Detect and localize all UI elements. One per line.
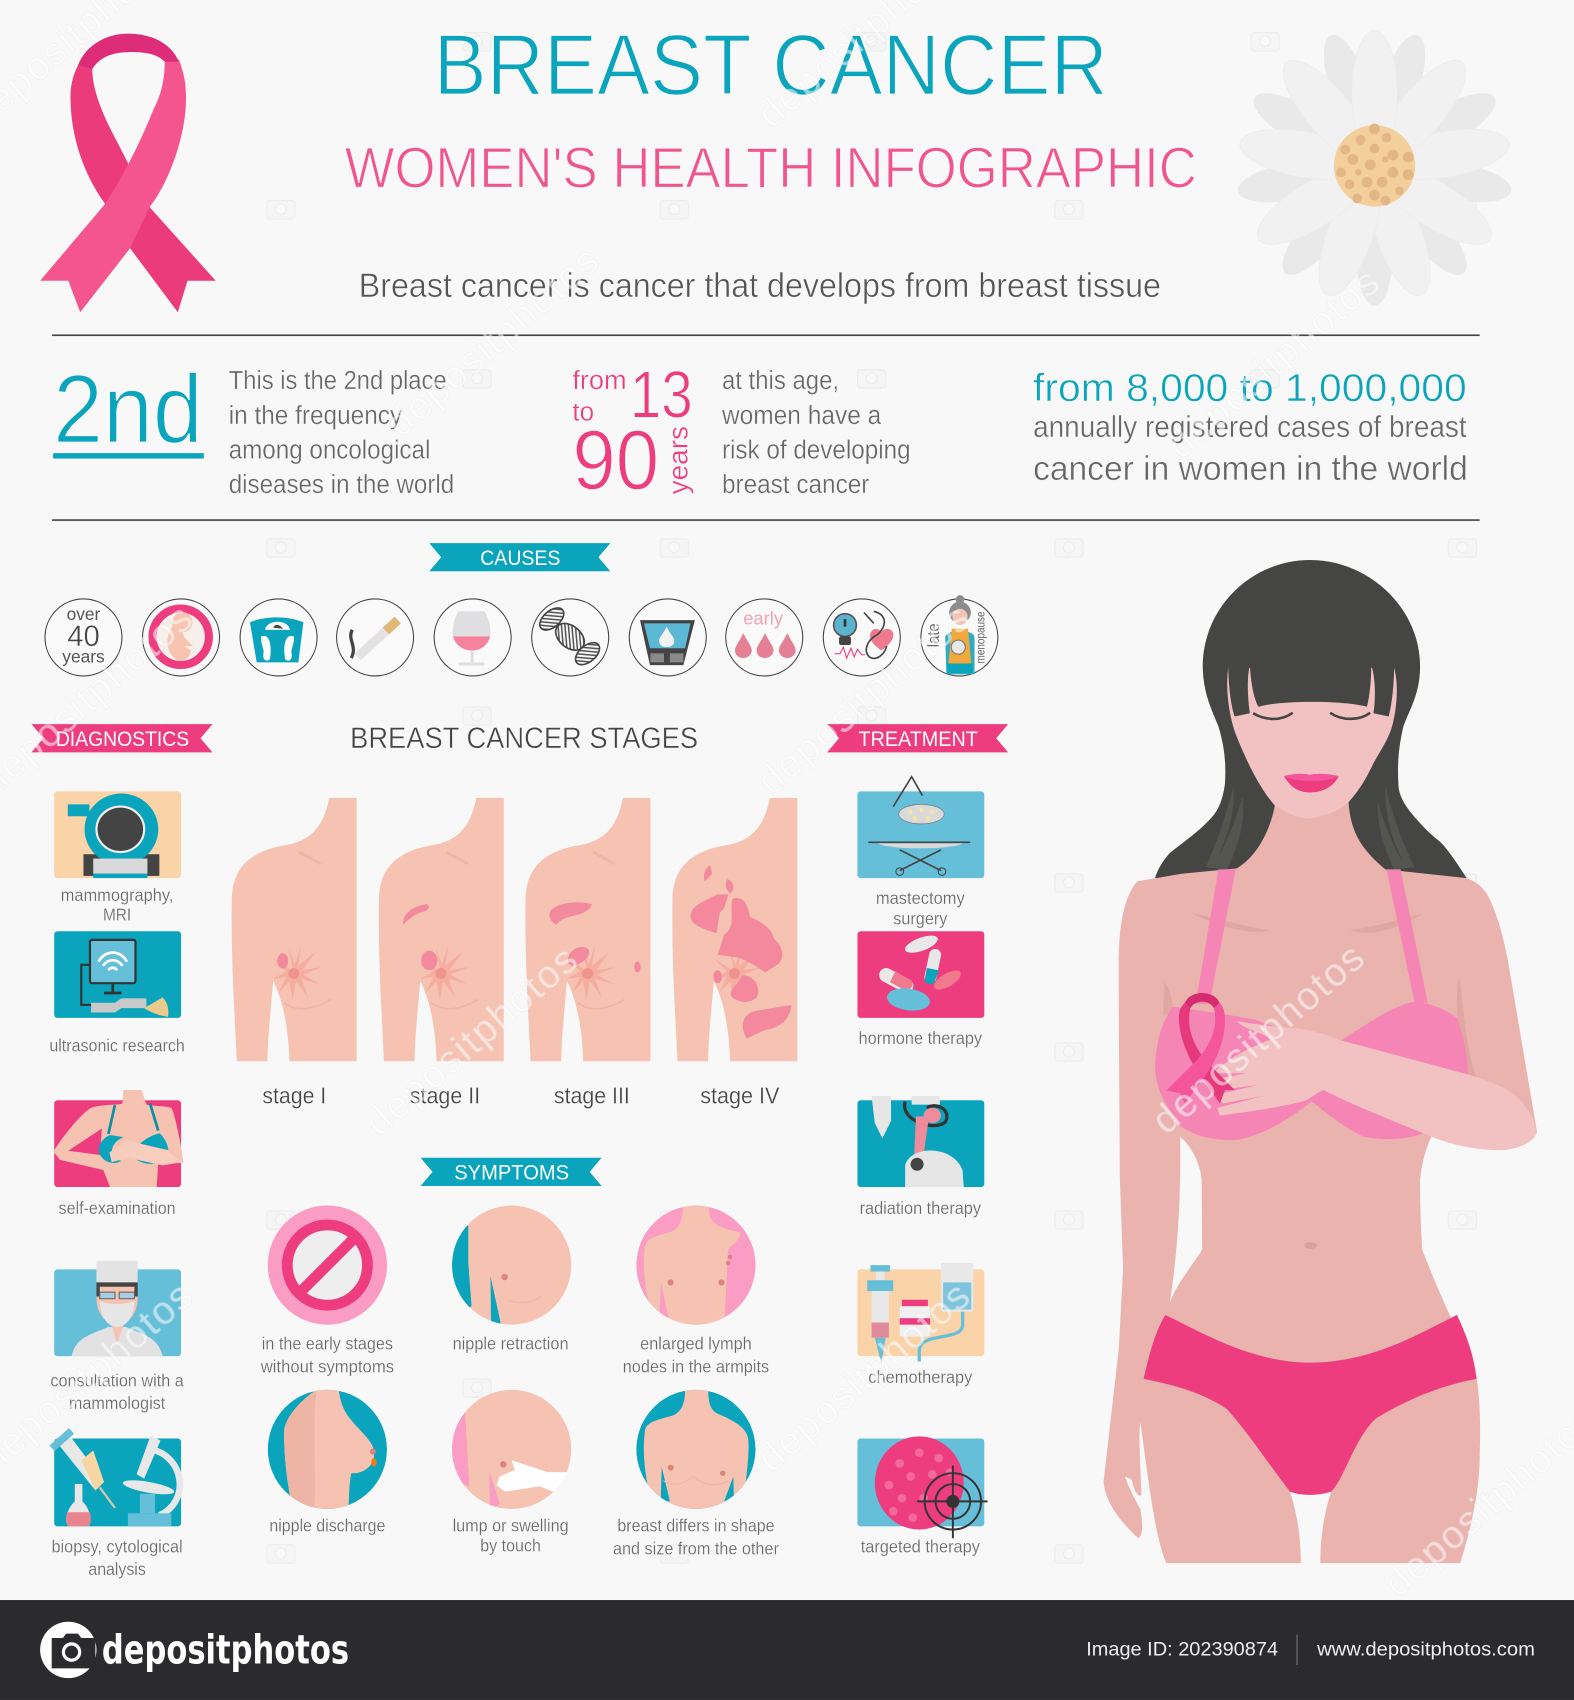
stage I illustration [232,798,357,1061]
label: hormone therapy [859,1028,982,1048]
label: MRI [103,904,131,924]
stat: age range: women have a [721,400,882,430]
label: mastectomy [876,888,965,908]
icon: chemotherapy [857,1263,984,1364]
face [1227,668,1397,818]
closed eyes [1253,713,1370,719]
stat: age range: risk of developing [722,435,911,465]
hair [1155,560,1467,878]
stage III label: stage III [554,1083,630,1109]
arm gap [1170,1137,1202,1303]
label: and size from the other [613,1539,779,1559]
stat: 2nd place [53,354,454,499]
icon: lump or swelling [444,1390,577,1509]
watermarks: depositphotos [750,1274,978,1481]
divider [52,519,1480,521]
label: self-examination [59,1198,176,1218]
heading: symptoms [421,1158,602,1186]
label [613,1516,779,1559]
icon: late menopause: late [925,623,943,647]
stat: age range: years [661,426,693,494]
heading: diagnostics: DIAGNOSTICS [56,726,189,751]
stage III illustration [525,798,650,1061]
stat: annual cases [1033,367,1468,488]
hair strands [1205,786,1415,869]
heading: causes [429,543,610,571]
stat text: diseases in the world [229,469,454,499]
watermarks: depositphotos [750,597,978,804]
icon: mastectomy surgery [857,777,984,878]
icon: ultrasound [54,931,181,1018]
label: without symptoms [260,1356,394,1376]
stat text: This is the 2nd place [229,365,447,395]
label: by touch [480,1535,541,1555]
stat: age range: at this age, [722,365,839,395]
divider [52,334,1480,336]
label: nipple discharge [269,1516,385,1536]
label: lump or swelling [453,1516,569,1536]
navel [1304,1242,1317,1249]
label: in the early stages [262,1334,393,1354]
icon: DNA helix [532,599,609,676]
label: mammography, [61,885,173,905]
stat number: 2nd [53,354,203,463]
icon: nipple discharge [268,1390,387,1509]
stat: age range: 90 [572,412,659,507]
panel: breast cancer stages [232,798,797,1109]
icon: daisy flower [1235,29,1514,306]
heading: symptoms: SYMPTOMS [454,1159,569,1184]
label: biopsy, cytological [51,1536,183,1556]
label: ultrasonic research [49,1036,185,1056]
icon: radiation therapy [857,1096,984,1187]
icon: scales [240,599,317,676]
arm shading [1163,978,1476,1078]
icon: late menopause [921,595,998,676]
stat: annual cases: annually registered cases of breast [1033,411,1467,444]
icon: early drops [726,599,803,676]
bikini bottom [1144,1315,1476,1495]
label [260,1334,394,1376]
body [1104,802,1537,1563]
bangs [1228,640,1394,717]
icon: fetus [143,599,220,676]
label: chemotherapy [868,1367,973,1387]
icon: over 40 years: 40 [67,621,100,653]
label: mammologist [69,1393,165,1413]
panel: treatment [857,777,988,1556]
label: nodes in the armpits [623,1356,769,1376]
label: breast differs in shape [617,1516,775,1536]
heading: causes: CAUSES [480,545,560,570]
stat: age range: to [572,397,594,427]
stat text [229,365,454,499]
icon: cigarette [337,599,414,676]
label: surgery [893,909,948,929]
icon: nipple retraction [444,1205,571,1328]
label [61,885,173,924]
stat text: in the frequency [229,400,402,430]
small ribbon on chest [1166,993,1235,1104]
icon: wine glass [434,599,511,676]
label: consultation with a [50,1370,184,1390]
stat text: among oncological [229,435,430,465]
subtitle: WOMEN'S HEALTH INFOGRAPHIC [345,137,1197,201]
label: nipple retraction [453,1334,569,1354]
bra cups [1155,1002,1468,1140]
heading: treatment [827,724,1008,752]
figure: woman illustration [1104,560,1537,1563]
icon: targeted therapy [857,1436,988,1538]
icon: breast differs [636,1390,756,1512]
image id: Image ID: 202390874 [1086,1638,1278,1660]
website: www.depositphotos.com [1316,1638,1535,1660]
watermarks: depositphotos [1159,261,1388,468]
icon: enlarged lymph nodes [636,1205,756,1328]
icon: self examination [53,1090,183,1187]
heading: treatment: TREATMENT [859,726,978,751]
collarbone shading [1190,913,1422,933]
icon: over 40 years [45,599,122,676]
icon: pink awareness ribbon [40,34,216,312]
watermark camera marks [267,33,1476,1563]
logo wordmark: depositphotos [102,1627,349,1673]
icon: biopsy [52,1431,181,1526]
panel: symptoms [260,1205,779,1559]
label [51,1536,183,1579]
icon: mammography MRI [54,791,181,878]
watermarks: depositphotos [357,938,586,1145]
icon: hormone therapy [857,931,984,1018]
stage IV illustration [672,798,797,1061]
watermarks: depositphotos [379,239,607,446]
stat underline [53,453,204,459]
icon: over 40 years: years [62,646,105,666]
tagline: Breast cancer is cancer that develops from breast tissue [359,267,1161,305]
heading: stages: BREAST CANCER STAGES [350,723,698,755]
stat: annual cases: cancer in women in the world [1033,450,1468,488]
stat: age range [572,357,911,507]
label: targeted therapy [861,1536,980,1556]
stage I label: stage I [262,1083,326,1109]
title: BREAST CANCER [434,16,1108,113]
icon: late menopause: menopause [973,611,987,663]
label [50,1370,184,1413]
panel: diagnostics [49,791,185,1579]
stage II label: stage II [410,1083,480,1109]
label [876,888,965,929]
label: enlarged lymph [640,1334,752,1354]
icon: consultation doctor [54,1261,181,1356]
panel: causes icons [45,595,998,676]
forearm and hand [1212,1021,1537,1150]
footer bar [0,1600,1574,1700]
icon: over 40 years: over [67,604,101,624]
icon: early drops: early [743,607,784,628]
stage II illustration [379,798,504,1061]
logo icon [40,1622,96,1678]
label: radiation therapy [860,1198,981,1218]
stat: age range: from [572,365,627,395]
separator [1296,1635,1298,1665]
stat: age range: breast cancer [722,469,870,499]
icon: no symptoms [268,1205,387,1325]
icon: water tester [629,599,706,676]
stage IV label: stage IV [700,1083,780,1109]
label: analysis [88,1559,146,1579]
label [453,1516,569,1555]
bra straps [1196,869,1428,1004]
watermarks: depositphotos [1144,936,1373,1143]
stat: age range: 13 [630,357,693,432]
label [623,1334,769,1376]
stat: annual cases: from 8,000 to 1,000,000 [1033,367,1467,410]
icon: blood pressure [823,599,900,676]
lips [1284,774,1339,792]
